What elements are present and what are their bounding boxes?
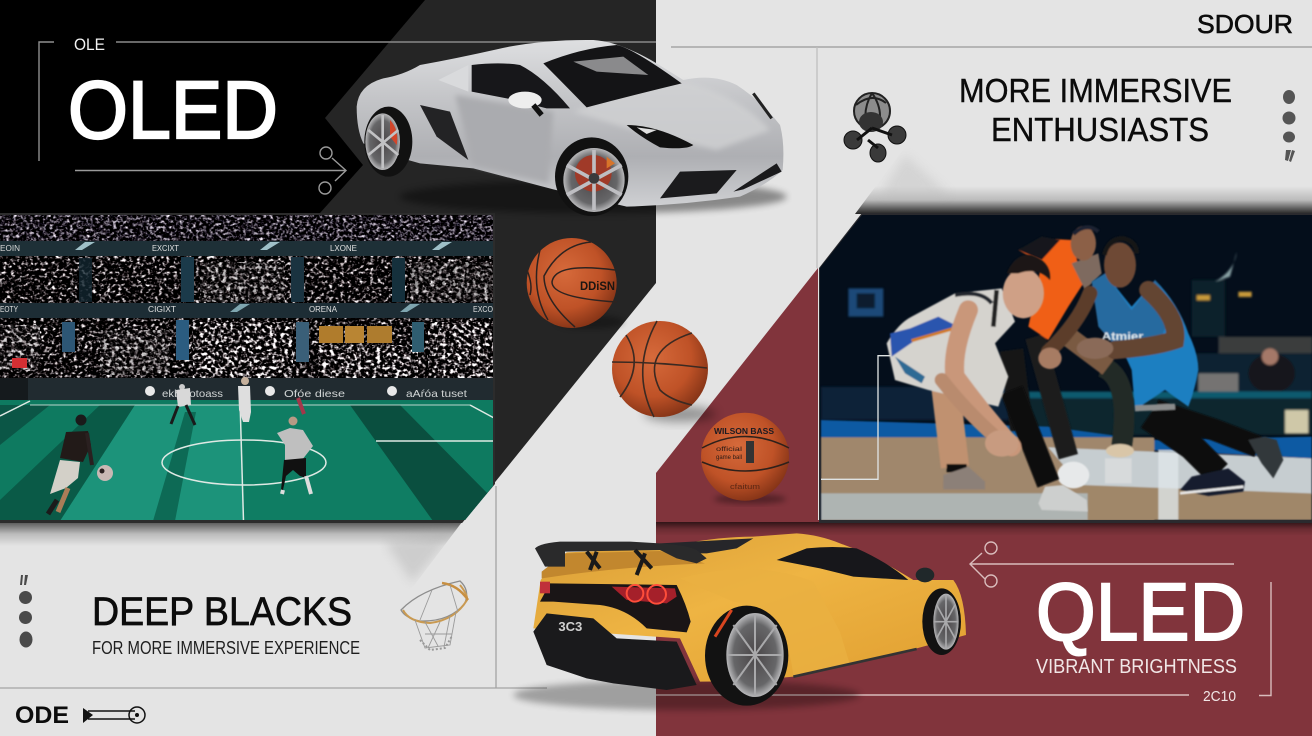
shadow above basketball screen xyxy=(840,155,1312,214)
front wheel xyxy=(922,588,961,655)
player in white xyxy=(887,255,1088,512)
brand SDOUR: SDOUR xyxy=(1197,9,1293,39)
stands: lower crowd xyxy=(0,318,494,378)
stands: upper band: EXCIXT xyxy=(152,244,179,253)
centre players xyxy=(171,377,304,425)
shadow under soccer screen xyxy=(0,522,470,582)
windshield xyxy=(543,45,682,107)
ad boards: ekbk otoass xyxy=(162,388,223,400)
ad boards xyxy=(0,378,494,401)
front wheel xyxy=(555,137,628,216)
door panel xyxy=(455,95,553,183)
screen: basketball game xyxy=(815,210,1312,527)
stands: lower band: EXCO xyxy=(473,305,493,314)
basketball middle xyxy=(612,321,716,422)
heading: deep blacks xyxy=(92,590,360,658)
headlight xyxy=(627,125,693,148)
car shadow xyxy=(513,680,860,710)
icon: basketball with lobes xyxy=(844,93,906,162)
hoop and net icon xyxy=(401,581,468,650)
side vent xyxy=(420,105,468,160)
icons: right side stack xyxy=(1282,90,1296,162)
stands: upper band xyxy=(0,241,494,256)
basketball bottom xyxy=(701,413,789,504)
panel: OLED black header xyxy=(0,0,425,213)
title OLED: OLED xyxy=(68,65,278,156)
ball markings: game ball xyxy=(716,455,742,461)
panel: dark centre wedge xyxy=(0,0,656,523)
subheading: FOR MORE IMMERSIVE EXPERIENCE xyxy=(92,638,360,658)
car: yellow sports car xyxy=(513,533,966,710)
icon: key pin xyxy=(83,707,145,723)
overlay bracket line xyxy=(821,355,891,480)
stands: middle crowd xyxy=(0,256,494,303)
stands: upper band: EOIN xyxy=(0,244,20,253)
panel: OLED heading block xyxy=(39,36,656,194)
bracket top-left xyxy=(39,42,54,161)
ad boards: aAŕóa tuset xyxy=(406,388,467,400)
ball markings: cfaitum xyxy=(730,484,760,491)
basketball top: DDiSN xyxy=(580,279,615,293)
footer logo ODE: ODE xyxy=(15,702,69,729)
tail lights xyxy=(540,582,677,604)
heading: more immersive enthusiasts: ENTHUSIASTS xyxy=(991,112,1209,149)
player in grey xyxy=(277,416,313,494)
ball markings xyxy=(714,426,774,491)
subtitle: VIBRANT BRIGHTNESS xyxy=(1036,656,1237,678)
panel: maroon QLED area xyxy=(656,268,1312,736)
mirror xyxy=(508,92,542,108)
small label OLE: OLE xyxy=(74,36,105,54)
stands: upper band: LXONE xyxy=(330,244,357,253)
title QLED: QLED xyxy=(1036,567,1245,658)
rear wing xyxy=(535,542,707,575)
mirror xyxy=(916,568,934,582)
screen: soccer match xyxy=(0,213,495,523)
player in blue: Atmier xyxy=(1102,331,1144,343)
stands: lower band xyxy=(0,303,494,318)
court xyxy=(821,420,1312,521)
football pitch xyxy=(0,400,494,521)
footer logo ODE xyxy=(15,702,145,729)
ad boards: Ofóe diese xyxy=(284,388,345,400)
heading: more immersive enthusiasts xyxy=(959,73,1232,149)
car: yellow sports car: 3C3 xyxy=(558,620,582,634)
player with ball xyxy=(48,414,113,514)
body xyxy=(357,40,783,207)
arena background xyxy=(821,252,1312,435)
stands: lower band: EOTY xyxy=(0,305,19,314)
stands: upper crowd xyxy=(0,215,494,242)
stands: lower band: ORENA xyxy=(309,305,338,314)
rear wheel xyxy=(705,606,788,706)
icons: left side stack xyxy=(19,575,32,648)
lower diffuser xyxy=(533,613,697,690)
rear wheel xyxy=(364,107,412,177)
arrows and QLED rules xyxy=(656,542,1271,705)
ball markings: WILSON BASS xyxy=(714,426,774,436)
hood highlight xyxy=(573,82,770,150)
body xyxy=(533,533,966,682)
rear black panel xyxy=(540,583,691,632)
top rule xyxy=(116,41,656,43)
ball markings: official xyxy=(716,447,742,453)
heading: deep blacks: DEEP BLACKS xyxy=(92,590,352,634)
hood edges xyxy=(753,93,772,118)
basketball top xyxy=(527,238,624,329)
bottom-left rules xyxy=(0,486,547,688)
player in orange xyxy=(1012,226,1134,488)
heading: more immersive enthusiasts: MORE IMMERSIVE xyxy=(959,73,1232,110)
shadow under basketball screen xyxy=(656,522,1312,536)
stands: lower band: CIGIXT xyxy=(148,305,176,314)
side windows xyxy=(472,63,570,108)
car: silver sports car xyxy=(357,40,787,216)
basketballs xyxy=(527,238,789,504)
car shadow xyxy=(400,180,787,213)
side windows xyxy=(777,547,908,580)
arrow with nodes xyxy=(75,147,346,194)
player in blue xyxy=(1038,238,1283,496)
year: 2C10 xyxy=(1203,688,1236,705)
